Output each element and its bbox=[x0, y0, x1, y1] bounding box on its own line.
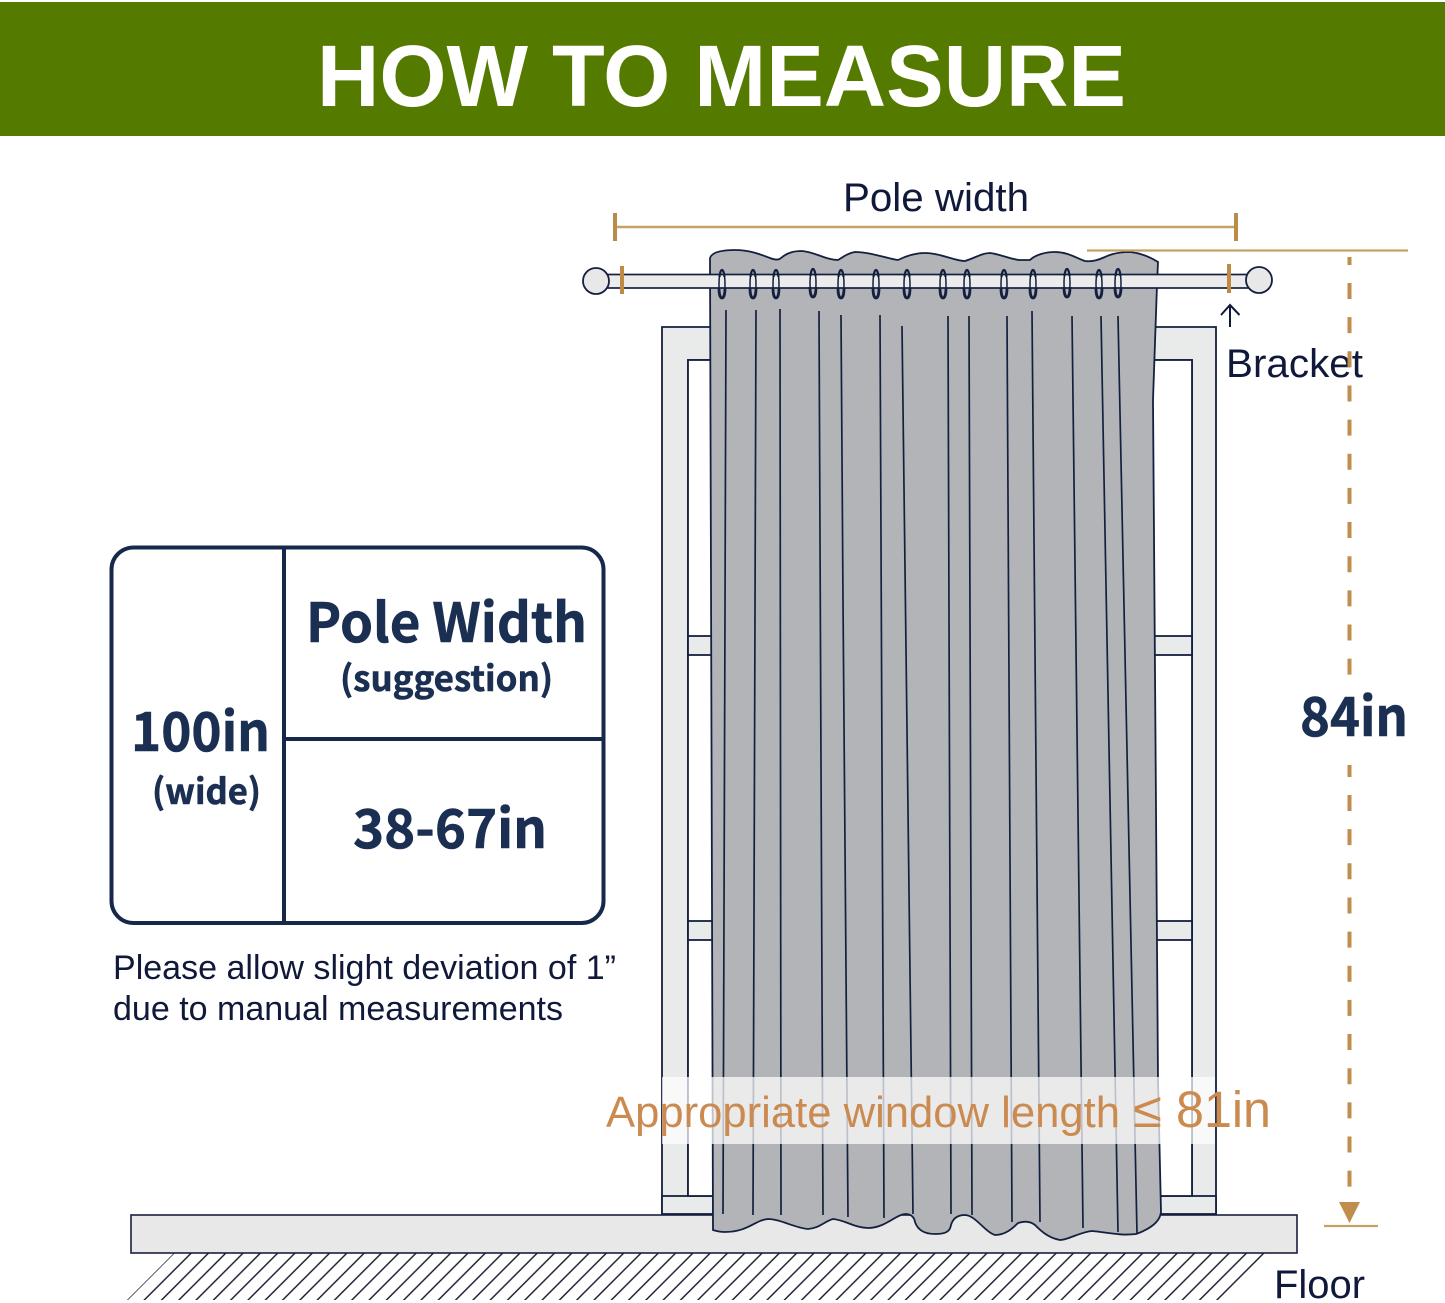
window opening bbox=[688, 360, 1192, 1196]
pole width heading: Pole Width bbox=[306, 579, 587, 658]
length value: 84in bbox=[1300, 673, 1408, 752]
pole width dimension bbox=[615, 176, 1236, 241]
curtain rod bbox=[583, 264, 1272, 298]
floor slab bbox=[131, 1215, 1297, 1253]
table dividers bbox=[284, 547, 603, 923]
deviation note bbox=[113, 949, 616, 1028]
length dimension bbox=[1087, 250, 1408, 1226]
arrow head bbox=[1339, 1202, 1360, 1223]
curtain bbox=[710, 250, 1161, 1240]
curtain rings bbox=[719, 269, 1121, 298]
upper mullion bbox=[688, 636, 1192, 655]
left bracket bbox=[620, 266, 624, 294]
pole width value: 38-67in bbox=[353, 785, 547, 864]
curtain pleats bbox=[723, 309, 1137, 1234]
curtain width value: 100in bbox=[131, 688, 270, 767]
title: HOW TO MEASURE bbox=[317, 28, 1126, 125]
table outline bbox=[112, 548, 604, 923]
bracket callout bbox=[1221, 305, 1363, 386]
top reference line bbox=[1087, 249, 1408, 252]
right bracket bbox=[1227, 264, 1231, 293]
suggestion caption: (suggestion) bbox=[340, 651, 553, 702]
pole width label: Pole width bbox=[843, 176, 1029, 220]
window length callout bbox=[606, 1077, 1271, 1144]
pole width line bbox=[615, 226, 1236, 228]
curtain width caption: (wide) bbox=[152, 764, 261, 815]
floor reference line bbox=[1324, 1225, 1378, 1227]
window sill bbox=[662, 1196, 1216, 1214]
bracket label: Bracket bbox=[1226, 342, 1363, 386]
bracket arrow bbox=[1221, 305, 1240, 327]
lower dashed line bbox=[1348, 765, 1352, 1187]
note line two: due to manual measurements bbox=[113, 990, 563, 1028]
callout band bbox=[662, 1077, 1215, 1144]
rod bar bbox=[605, 274, 1253, 288]
floor bbox=[127, 1215, 1297, 1300]
upper dashed line bbox=[1348, 257, 1352, 675]
note line one: Please allow slight deviation of 1” bbox=[113, 949, 616, 987]
callout value: 81in bbox=[1176, 1081, 1271, 1138]
pole width end ticks bbox=[615, 213, 1236, 241]
callout text: Appropriate window length bbox=[606, 1088, 1120, 1137]
floor hatching bbox=[127, 1253, 1266, 1300]
left finial bbox=[583, 268, 609, 294]
header banner bbox=[0, 2, 1445, 136]
outer frame bbox=[662, 327, 1216, 1214]
size table bbox=[112, 547, 604, 923]
lower mullion bbox=[688, 921, 1192, 940]
right finial bbox=[1246, 267, 1272, 293]
window frame bbox=[662, 327, 1216, 1214]
curtain panel bbox=[710, 250, 1161, 1240]
less than or equal sign: ≤ bbox=[1133, 1082, 1162, 1138]
